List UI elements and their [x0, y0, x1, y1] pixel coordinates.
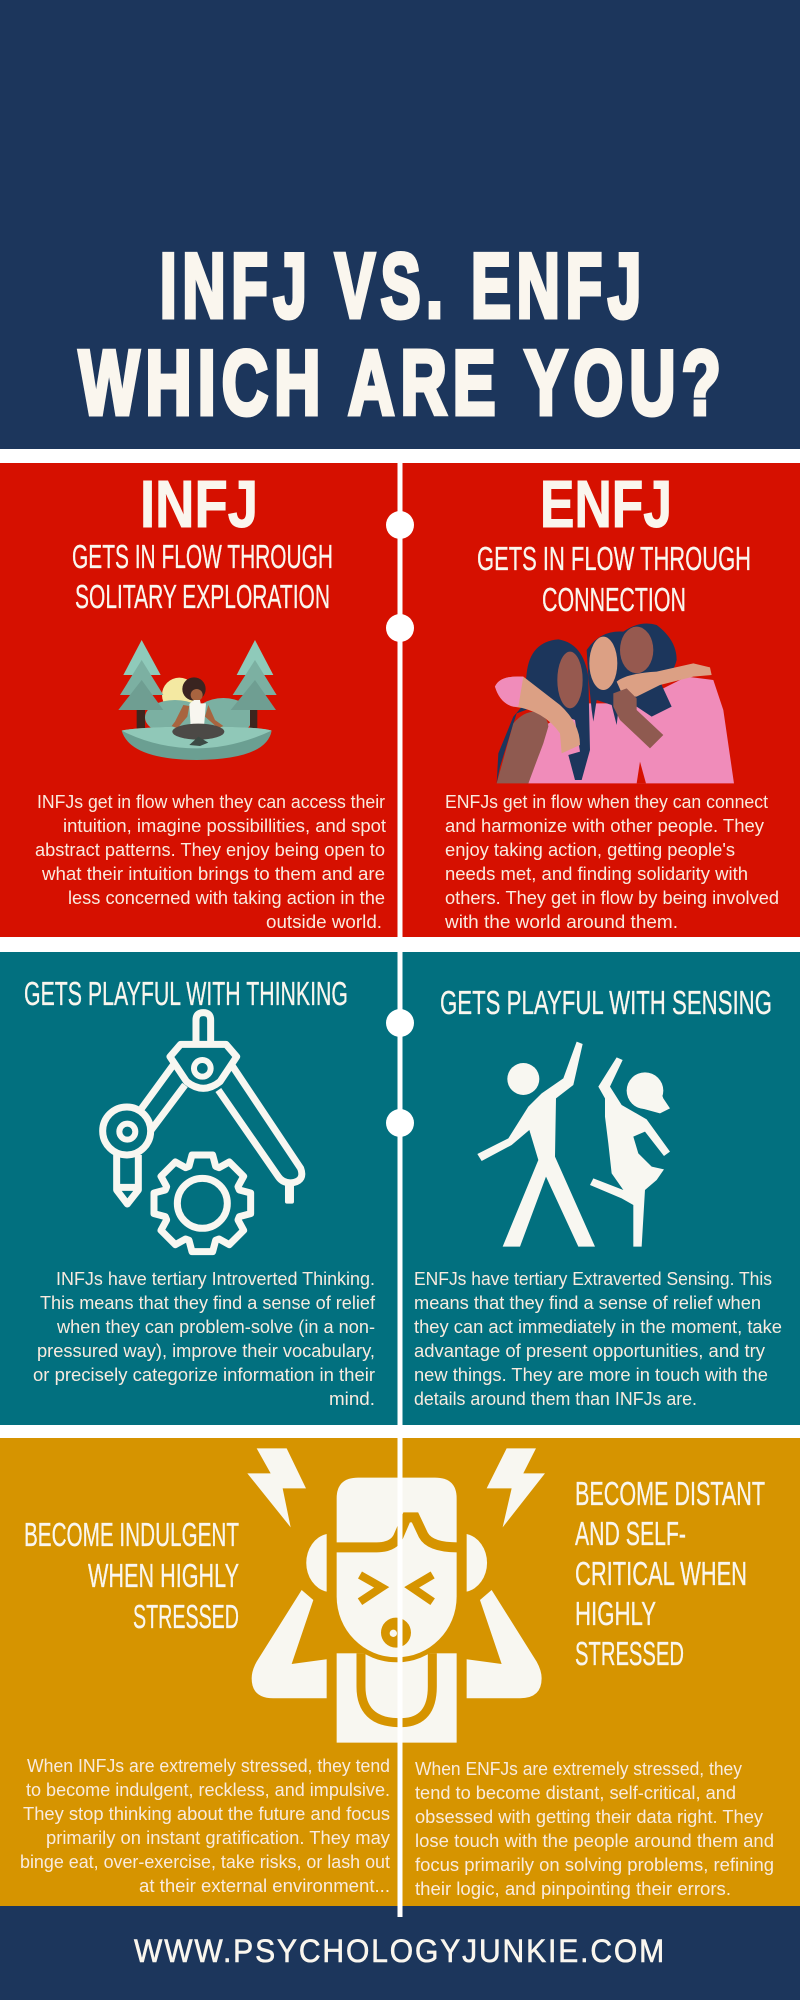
text: INFJ stress: at their external environment... [139, 1876, 390, 1896]
text: INFJ flow: abstract patterns. They enjoy being open to [35, 840, 385, 860]
text: ENFJ stress: their logic, and pinpointing their errors. [415, 1879, 731, 1899]
subheading: INFJ flow: SOLITARY EXPLORATION [75, 578, 330, 615]
text: INFJ flow: less concerned with taking action in the [68, 888, 385, 908]
heading: INFJ stress: STRESSED [133, 1598, 239, 1635]
text: ENFJ sensing: they can act immediately in the moment, take [414, 1317, 782, 1337]
text: ENFJ flow: others. They get in flow by being involved [445, 888, 779, 908]
text: INFJ flow: outside world. [266, 912, 382, 932]
text: ENFJ stress [415, 1759, 774, 1899]
text: INFJ flow [35, 792, 386, 932]
text: INFJ thinking: This means that they find a sense of relief [40, 1293, 376, 1313]
subheading: ENFJ flow [477, 540, 751, 618]
text: INFJ stress: When INFJs are extremely stressed, they tend [27, 1756, 390, 1776]
text: ENFJ sensing: details around them than INFJs are. [414, 1389, 697, 1409]
text: INFJ flow: what their intuition brings to them and are [41, 864, 385, 884]
title [79, 236, 727, 434]
subheading: INFJ flow: GETS IN FLOW THROUGH [72, 538, 333, 575]
text: ENFJ flow: enjoy taking action, getting people's [445, 840, 735, 860]
heading: ENFJ stress: AND SELF- [575, 1515, 686, 1552]
text: INFJ stress: They stop thinking about the future and focus [23, 1804, 390, 1824]
text: ENFJ stress: focus primarily on solving problems, refining [415, 1855, 774, 1875]
text: INFJ stress: binge eat, over-exercise, take risks, or lash out [20, 1852, 390, 1872]
heading: ENFJ stress [575, 1475, 765, 1672]
text: ENFJ stress: obsessed with getting their data right. They [415, 1807, 763, 1827]
text: ENFJ flow: with the world around them. [444, 912, 678, 932]
footer banner [0, 1906, 800, 2000]
heading: gets playful with thinking: GETS PLAYFUL WITH THINKING [24, 975, 348, 1012]
text: INFJ thinking: mind. [329, 1389, 375, 1409]
text: ENFJ sensing [414, 1269, 782, 1409]
panel: playful (teal) [0, 952, 800, 1425]
heading: ENFJ stress: HIGHLY [575, 1595, 656, 1632]
text: INFJ stress [20, 1756, 390, 1896]
subheading: INFJ flow [72, 538, 333, 615]
panel: flow (red) [0, 463, 800, 937]
text: INFJ thinking [33, 1269, 376, 1409]
text: INFJ thinking: INFJs have tertiary Introverted Thinking. [56, 1269, 375, 1289]
icon: stressed head with lightning [247, 1448, 545, 1743]
text: ENFJ sensing: new things. They are more in touch with the [414, 1365, 768, 1385]
text: ENFJ stress: tend to become distant, self-critical, and [415, 1783, 736, 1803]
text: ENFJ stress: lose touch with the people around them and [415, 1831, 774, 1851]
text: INFJ stress: to become indulgent, reckless, and impulsive. [26, 1780, 390, 1800]
text: INFJ flow: intuition, imagine possibillities, and spot [63, 816, 386, 836]
icon: stressed figure [252, 1478, 542, 1743]
text: INFJ thinking: pressured way), improve their vocabulary, [37, 1341, 375, 1361]
icon: person meditating between trees [118, 640, 277, 760]
text: INFJ thinking: or precisely categorize information in their [33, 1365, 375, 1385]
title banner [0, 0, 800, 449]
text: ENFJ sensing: advantage of present opportunities, and try [414, 1341, 765, 1361]
icon: left lightning bolt [247, 1448, 306, 1527]
text: INFJ stress: primarily on instant gratification. They may [46, 1828, 390, 1848]
subheading: ENFJ flow: CONNECTION [542, 581, 686, 618]
center divider line with dots [386, 463, 414, 1917]
text: INFJ thinking: when they can problem-solve (in a non- [56, 1317, 375, 1337]
footer website url: WWW.PSYCHOLOGYJUNKIE.COM [134, 1933, 666, 1969]
heading: ENFJ stress: STRESSED [575, 1635, 684, 1672]
text: ENFJ flow: needs met, and finding solidarity with [445, 864, 748, 884]
heading: INFJ: INFJ [140, 467, 258, 542]
icon: right lightning bolt [487, 1448, 545, 1527]
text: ENFJ flow [444, 792, 779, 932]
text: ENFJ flow: ENFJs get in flow when they can connect [445, 792, 768, 812]
text: ENFJ sensing: means that they find a sense of relief when [414, 1293, 761, 1313]
text: ENFJ flow: and harmonize with other people. They [445, 816, 764, 836]
heading: INFJ stress [24, 1516, 239, 1635]
panel: stress (gold) [0, 1438, 800, 1906]
text: ENFJ stress: When ENFJs are extremely stressed, they [415, 1759, 742, 1779]
icon: two people dancing [477, 1042, 670, 1247]
heading: INFJ stress: BECOME INDULGENT [24, 1516, 239, 1553]
icon: three friends embracing [495, 623, 734, 783]
icon: drafting compass and gear [103, 1013, 302, 1252]
text: INFJ flow: INFJs get in flow when they can access their [37, 792, 385, 812]
heading: INFJ stress: WHEN HIGHLY [88, 1557, 239, 1594]
heading: ENFJ: ENFJ [540, 467, 672, 542]
text: ENFJ sensing: ENFJs have tertiary Extraverted Sensing. This [414, 1269, 772, 1289]
